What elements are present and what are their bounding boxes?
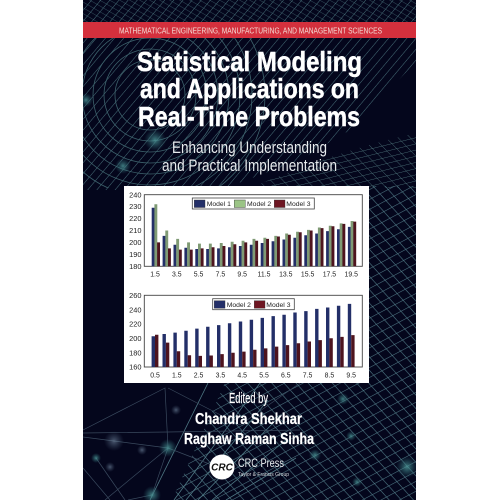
x axis labels: 9.5	[346, 372, 356, 380]
y axis labels: 180	[129, 348, 142, 357]
legend: Model 2	[227, 302, 251, 309]
x axis labels: 13.5	[279, 272, 293, 278]
y axis labels	[129, 291, 142, 372]
legend: Model 2	[247, 201, 271, 208]
x axis labels: 5.5	[259, 372, 269, 380]
panel: charts	[124, 186, 369, 383]
x axis labels: 2.5	[194, 372, 204, 380]
x axis labels	[150, 372, 356, 380]
legend: Model 3	[266, 302, 291, 309]
y axis labels: 200	[129, 238, 142, 247]
editors: Edited by	[229, 390, 268, 407]
x axis labels: 9.5	[237, 272, 247, 278]
x axis labels: 0.5	[150, 372, 160, 380]
publisher logo: CRC Press	[238, 458, 284, 470]
editors: Raghaw Raman Sinha	[184, 431, 314, 448]
legend	[213, 299, 294, 310]
x axis labels: 17.5	[323, 272, 336, 278]
editors: Chandra Shekhar	[195, 411, 302, 428]
y axis labels	[129, 190, 142, 271]
subtitle	[162, 138, 337, 175]
title: Statistical Modeling	[137, 46, 362, 77]
x axis labels	[150, 272, 358, 278]
y axis labels: 260	[129, 291, 142, 300]
publisher logo: CRC	[211, 462, 234, 474]
x axis labels: 6.5	[281, 372, 291, 380]
subtitle: Enhancing Understanding	[172, 138, 327, 157]
series banner	[83, 22, 416, 38]
bar chart: three models	[129, 190, 362, 278]
y axis labels: 180	[129, 262, 142, 271]
x axis labels: 3.5	[216, 372, 225, 380]
title	[137, 46, 362, 132]
x axis labels: 8.5	[325, 372, 334, 380]
editors	[184, 390, 314, 448]
y axis labels: 210	[129, 226, 142, 235]
x axis labels: 1.5	[172, 372, 182, 380]
bar chart: two models	[129, 291, 362, 380]
y axis labels: 230	[129, 202, 142, 211]
y axis labels: 220	[129, 214, 142, 223]
title: and Applications on	[140, 73, 359, 104]
legend	[192, 198, 314, 209]
publisher logo: Taylor & Francis Group	[238, 472, 289, 478]
book cover	[83, 0, 416, 500]
subtitle: and Practical Implementation	[162, 156, 337, 175]
x axis labels: 3.5	[172, 272, 182, 278]
y axis labels: 240	[129, 190, 142, 199]
legend: Model 1	[207, 201, 231, 208]
title: Real-Time Problems	[138, 101, 360, 132]
y axis labels: 200	[129, 334, 142, 343]
series banner: MATHEMATICAL ENGINEERING, MANUFACTURING, AND MANAGEMENT SCIENCES	[119, 26, 382, 36]
y axis labels: 240	[129, 305, 142, 314]
x axis labels: 7.5	[216, 272, 225, 278]
y axis labels: 220	[129, 320, 142, 329]
x axis labels: 5.5	[194, 272, 204, 278]
y axis labels: 190	[129, 250, 142, 259]
x axis labels: 4.5	[237, 372, 247, 380]
publisher logo	[210, 454, 289, 480]
x axis labels: 19.5	[344, 272, 358, 278]
x axis labels: 1.5	[150, 272, 160, 278]
x axis labels: 7.5	[303, 372, 313, 380]
x axis labels: 11.5	[258, 272, 271, 278]
y axis labels: 160	[129, 363, 142, 372]
x axis labels: 15.5	[301, 272, 314, 278]
cover background	[83, 0, 416, 500]
legend: Model 3	[286, 201, 311, 208]
